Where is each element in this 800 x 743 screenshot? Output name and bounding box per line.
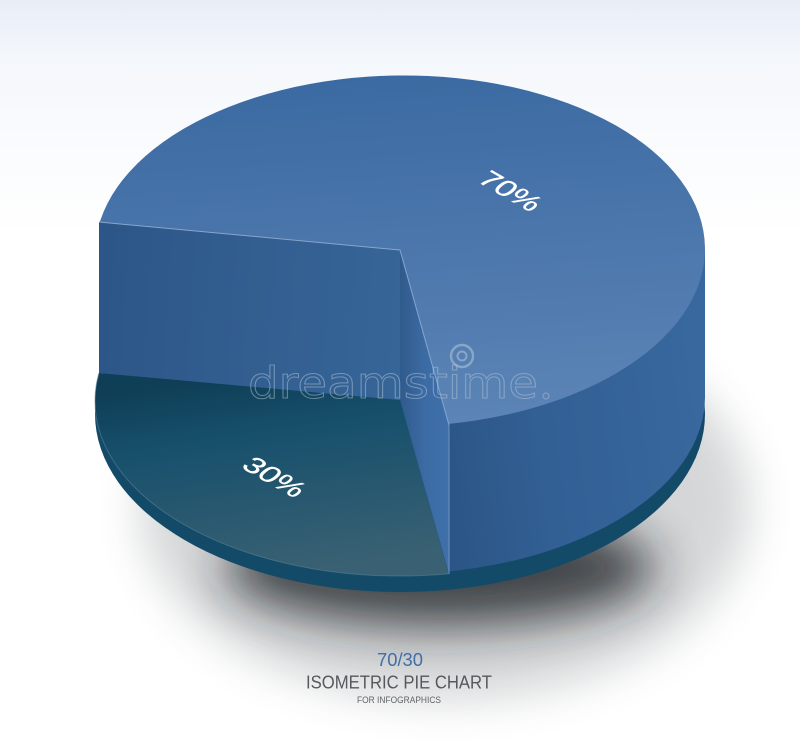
side wall: inner cut face [400, 250, 449, 574]
watermark: dreamstime [248, 358, 538, 409]
ratio: 70/30 [377, 650, 423, 670]
label: 70%: 70% [471, 166, 550, 216]
title block [306, 650, 492, 705]
drop shadow [140, 310, 750, 700]
slice edge highlights [99, 222, 449, 574]
watermark [248, 345, 549, 409]
base disc [95, 236, 705, 592]
side wall: outer rim [449, 251, 705, 572]
subtitle: FOR INFOGRAPHICS [357, 695, 441, 705]
30% slice surface [94, 372, 449, 576]
side wall: left cut face [99, 222, 400, 400]
main title: ISOMETRIC PIE CHART [306, 672, 492, 692]
label: 30%: 30% [235, 452, 314, 502]
70% top surface [93, 72, 707, 430]
